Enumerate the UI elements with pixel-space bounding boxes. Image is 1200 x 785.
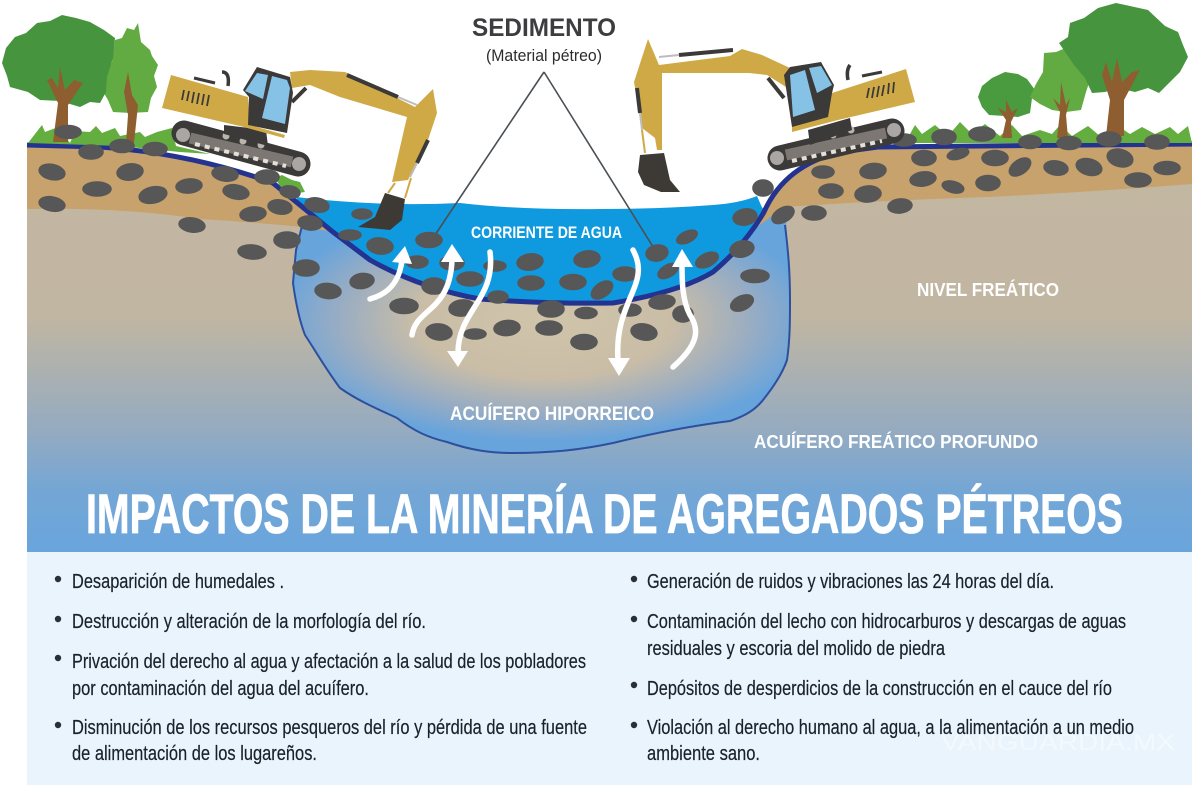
tree: small xyxy=(978,72,1035,138)
grass left xyxy=(28,125,305,196)
left column: Privación del derecho al agua y afectación a la salud de los pobladores xyxy=(72,650,586,673)
sediment pointer lines xyxy=(435,72,655,250)
left column: Disminución de los recursos pesqueros del río y pérdida de una fuente xyxy=(72,716,587,739)
label: sediment: (Material pétreo) xyxy=(486,46,602,65)
label: water stream: CORRIENTE DE AGUA xyxy=(471,223,622,242)
cab windows xyxy=(790,66,832,117)
excavator left xyxy=(162,67,437,230)
watermark: VANGUARDIA.MX xyxy=(941,729,1175,755)
hyporheic aquifer xyxy=(293,207,790,453)
tree: dark green xyxy=(1059,3,1188,136)
arrow: down 2 xyxy=(608,250,638,376)
arm and boom xyxy=(290,70,437,182)
tree: dark green xyxy=(2,15,115,142)
machine body xyxy=(162,75,285,138)
machine body xyxy=(792,69,915,132)
soil layer xyxy=(27,144,1192,232)
arm and boom xyxy=(634,39,790,150)
label: hyporheic aquifer: ACUÍFERO HIPORREICO xyxy=(450,403,654,425)
hydraulic cylinders xyxy=(347,75,398,97)
undercarriage xyxy=(224,125,268,146)
left column: por contaminación del agua del acuífero. xyxy=(72,677,369,700)
tree: light green xyxy=(102,23,158,143)
cab xyxy=(243,67,293,133)
right column: Generación de ruidos y vibraciones las 24 horas del día. xyxy=(647,570,1054,593)
panel: impacts list xyxy=(27,552,1192,785)
right column: ambiente sano. xyxy=(647,742,760,765)
arrow: up 2 xyxy=(412,244,464,335)
left column xyxy=(55,570,587,765)
arrow: down 1 xyxy=(447,252,491,367)
label: sediment xyxy=(472,14,616,65)
hydraulic cylinders xyxy=(679,50,733,55)
cab xyxy=(784,62,834,127)
undercarriage xyxy=(808,118,852,145)
bucket xyxy=(358,193,405,230)
cab windows xyxy=(245,73,290,124)
track xyxy=(176,128,306,171)
label: sediment: SEDIMENTO xyxy=(472,14,616,42)
bucket xyxy=(638,153,680,192)
river bed outline xyxy=(27,144,1192,303)
label: deep aquifer: ACUÍFERO FREÁTICO PROFUNDO xyxy=(754,431,1038,452)
exhaust and grille xyxy=(182,72,228,106)
sediment rocks xyxy=(38,126,1180,350)
arrow: up 3 xyxy=(672,249,696,367)
label: water table: NIVEL FREÁTICO xyxy=(917,279,1059,300)
tree: light green xyxy=(1030,47,1089,138)
river water xyxy=(296,196,764,303)
deep ground background xyxy=(27,144,1192,552)
left column: de alimentación de los lugareños. xyxy=(72,742,317,765)
flow arrows xyxy=(370,244,696,376)
right column: residuales y escoria del molido de piedra xyxy=(647,637,945,660)
grass right xyxy=(905,122,1192,143)
trees left xyxy=(2,15,158,143)
right column xyxy=(631,570,1134,765)
left column: Destrucción y alteración de la morfología del río. xyxy=(72,610,426,633)
arrow: up 1 xyxy=(370,246,412,299)
trees right xyxy=(978,3,1188,138)
exhaust and grille xyxy=(847,65,894,98)
track xyxy=(770,123,901,165)
left column: Desaparición de humedales . xyxy=(72,570,284,593)
excavator right xyxy=(634,39,915,192)
